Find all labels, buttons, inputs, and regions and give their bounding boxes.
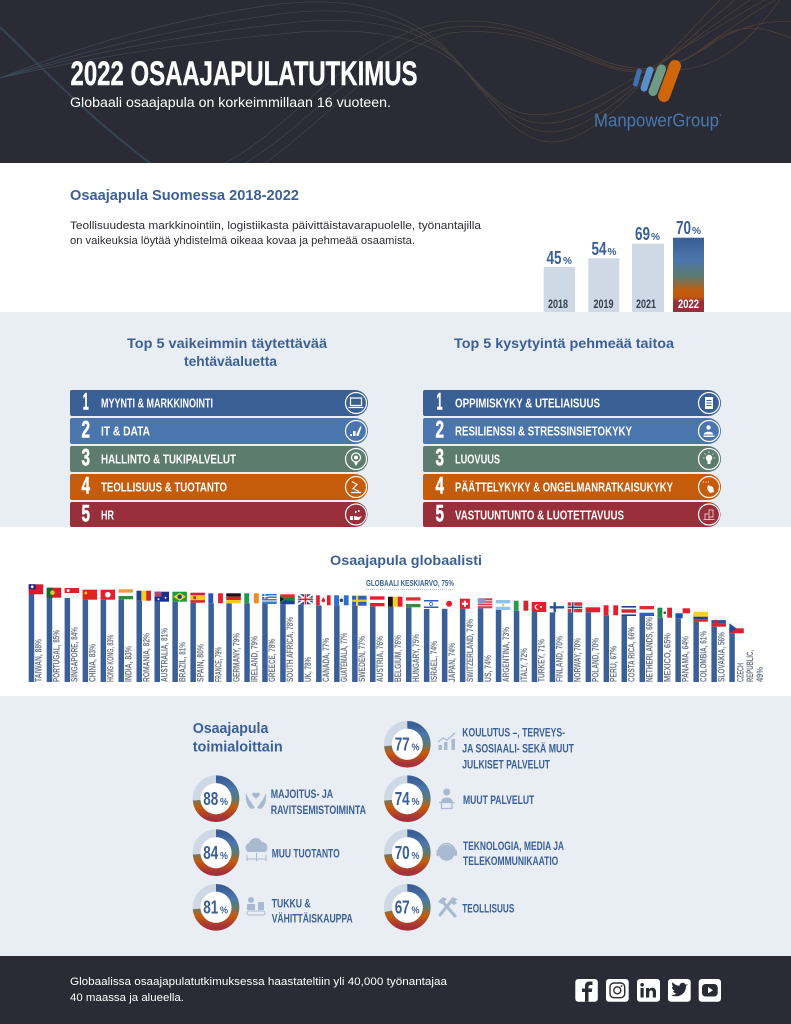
donut: 74%: %	[412, 797, 420, 808]
donut: 74%: 74	[395, 789, 410, 809]
bar: France	[208, 593, 224, 682]
role 4: TEOLLISUUS & TUOTANTO	[101, 480, 227, 495]
bar: Costa Rica	[622, 606, 638, 682]
bar: Japan: JAPAN, 74%	[447, 643, 458, 682]
bar chart: Finland 2018-2022: 2022	[678, 299, 699, 311]
skill 4: 4	[436, 472, 444, 499]
bar: Norway	[568, 602, 584, 682]
bar: Portugal	[47, 588, 63, 682]
bar: Sweden	[352, 596, 368, 682]
skill 5: 5	[436, 500, 444, 527]
label: education, health, public: KOULUTUS –, TERVEYS-	[462, 726, 565, 740]
bar chart: Finland 2018-2022: 2019	[594, 299, 614, 311]
label: wholesale and retail: TUKKU &	[272, 897, 311, 911]
donut: 67%: %	[412, 906, 420, 916]
bar: Czech Republic: 49%	[755, 667, 766, 682]
label: wholesale and retail	[272, 897, 353, 926]
bar chart: Finland 2018-2022: 2021	[636, 299, 656, 311]
text block: intro: Teollisuudesta markkinointiin, logistiikasta päivittäistavarapuolelle, työnantajilla	[70, 220, 482, 232]
bar: Peru	[604, 605, 620, 682]
bar: Panama: PANAMA, 64%	[680, 636, 691, 682]
label: other services: MUUT PALVELUT	[463, 793, 535, 807]
bar: Ireland: IRELAND, 79%	[249, 636, 260, 682]
bar: Hungary: HUNGARY, 75%	[411, 634, 422, 682]
bar: UK	[298, 594, 314, 682]
footer text	[70, 976, 448, 1004]
global average label: GLOBAALI KESKIARVO, 75%	[366, 579, 454, 588]
bar chart: Finland 2018-2022: 2018	[548, 299, 568, 311]
bar: Guatemala: GUATEMALA, 77%	[339, 633, 350, 682]
text block: intro	[70, 220, 482, 247]
bar: Czech Republic: REPUBLIC,	[745, 650, 756, 682]
icon: hammer and wrench	[438, 897, 458, 916]
bar: Hungary	[406, 597, 422, 682]
bar: Switzerland: SWITZERLAND, 74%	[465, 619, 476, 682]
role 1: MYYNTI & MARKKINOINTI	[101, 396, 213, 411]
skill 4	[423, 472, 721, 500]
bar: Slovakia	[711, 617, 727, 682]
bar: Singapore: SINGAPORE, 84%	[70, 627, 81, 682]
bar: Israel	[424, 599, 440, 682]
heading: by industry	[193, 721, 283, 756]
bar: Ireland	[244, 593, 260, 682]
bar: Australia: AUSTRALIA, 81%	[160, 628, 170, 682]
bar chart: Finland 2018-2022: 45	[546, 248, 562, 268]
bar chart: Finland 2018-2022: 70	[676, 218, 691, 238]
donut: 77%: 77	[395, 734, 410, 754]
list: top 5 roles	[70, 388, 368, 527]
text block: intro: on vaikeuksia löytää yhdistelmä oikeaa kovaa ja pehmeää osaamista.	[70, 235, 415, 247]
bar: Spain: SPAIN, 80%	[195, 644, 206, 682]
bar: Belgium: BELGIUM, 76%	[393, 635, 404, 682]
bar: US: US, 74%	[483, 655, 494, 682]
role 3: 3	[82, 444, 90, 471]
bar: Argentina: ARGENTINA, 73%	[501, 627, 512, 682]
role 4	[70, 472, 368, 500]
bar: Italy	[514, 601, 530, 682]
donut: 84%: 84	[203, 843, 218, 863]
role 2: 2	[82, 416, 90, 444]
icon: conveyor	[247, 897, 265, 915]
role 2	[70, 416, 368, 444]
bar: Argentina	[496, 600, 512, 682]
bar chart: Finland 2018-2022: %	[608, 247, 617, 258]
role 1	[70, 388, 368, 416]
icon: person at desk	[439, 788, 454, 808]
bar: Costa Rica: COSTA RICA, 66%	[626, 627, 638, 682]
bar: Poland: POLAND, 70%	[591, 638, 602, 682]
heading: global: Osaajapula globaalisti	[330, 552, 482, 568]
skill 2: RESILIENSSI & STRESSINSIETOKYKY	[455, 424, 632, 439]
donut: 81%: 81	[203, 898, 218, 918]
donut: 84%	[197, 833, 235, 872]
bar: Spain	[190, 593, 206, 682]
list: top 5 soft skills	[423, 388, 721, 527]
heading: by industry: toimialoittain	[193, 740, 283, 756]
footer text: 40 maassa ja alueella.	[70, 992, 184, 1004]
subtitle: Globaali osaajapula on korkeimmillaan 16 vuoteen.	[70, 95, 391, 110]
skill 5: VASTUUNTUNTO & LUOTETTAVUUS	[455, 508, 624, 522]
bar: Turkey: TURKEY, 71%	[537, 639, 548, 682]
heading: top 5 roles: tehtäväaluetta	[184, 354, 277, 369]
skill 2	[423, 416, 721, 444]
role 1: 1	[83, 388, 89, 416]
bar chart: countries	[29, 584, 766, 682]
skill 5	[423, 500, 720, 527]
label: technology, media, telecom: TELEKOMMUNIKAATIO	[463, 854, 558, 868]
footer text: Globaalissa osaajapulatutkimuksessa haastateltiin yli 40,000 työnantajaa	[70, 976, 448, 988]
header band	[0, 0, 791, 163]
role 4: 4	[82, 472, 90, 499]
bar: Turkey	[532, 602, 548, 682]
bar: South Africa: SOUTH AFRICA, 78%	[285, 617, 296, 682]
bar: Finland	[550, 602, 566, 682]
label: education, health, public	[462, 726, 574, 771]
skill 3: LUOVUUS	[455, 452, 500, 467]
donut: 88%	[197, 779, 235, 818]
role 5	[70, 500, 368, 527]
label: technology, media, telecom: TEKNOLOGIA, MEDIA JA	[463, 839, 564, 853]
donut: 81%: %	[220, 906, 228, 916]
bar: Czech Republic: CZECH	[735, 663, 746, 682]
heading: by industry: Osaajapula	[193, 721, 269, 737]
bar: Peru: PERU, 67%	[609, 646, 620, 682]
bar: Guatemala	[334, 595, 350, 682]
logo: ManpowerGroup	[594, 66, 721, 131]
bar: Australia	[154, 592, 170, 682]
icon: cloud network	[246, 838, 267, 861]
bar: Norway: NORWAY, 70%	[573, 638, 584, 682]
bar: Italy: ITALY, 72%	[519, 648, 530, 682]
bar: Taiwan: TAIWAN, 88%	[34, 639, 45, 682]
bar: Hong Kong: HONG KONG, 83%	[106, 635, 117, 682]
bar: Canada: CANADA, 77%	[321, 638, 332, 682]
bar: Singapore	[65, 588, 81, 682]
bar chart: Finland 2018-2022: %	[692, 226, 701, 237]
donut: 70%	[388, 833, 427, 872]
bar: Romania: ROMANIA, 82%	[142, 633, 152, 682]
role 3	[70, 444, 368, 472]
bar: Mexico: MEXICO, 65%	[662, 633, 674, 682]
heading: top 5 soft skills: Top 5 kysytyintä pehmeää taitoa	[454, 336, 675, 351]
donut: 67%	[388, 888, 427, 927]
bar: Israel: ISRAEL, 74%	[429, 641, 440, 682]
bar: Colombia: COLOMBIA, 61%	[698, 631, 709, 682]
bar: Switzerland	[460, 599, 476, 682]
donut: 70%: 70	[395, 843, 410, 863]
heading: top 5 roles: Top 5 vaikeimmin täytettävää	[127, 336, 328, 351]
bar chart: Finland 2018-2022	[544, 218, 704, 312]
donut: 88%: 88	[203, 789, 218, 809]
skill 3	[423, 444, 721, 472]
logo: ManpowerGroup: ManpowerGroup	[594, 110, 719, 131]
donut: 88%: %	[220, 797, 228, 808]
bar chart: Finland 2018-2022: %	[563, 256, 572, 267]
bar: Finland: FINLAND, 70%	[555, 636, 566, 682]
icon: Instagram	[606, 979, 629, 1002]
panel: Finland shortage	[0, 163, 791, 312]
icon: growth chart	[438, 733, 455, 750]
label: other production: MUU TUOTANTO	[272, 847, 340, 861]
bar: Czech Republic	[729, 623, 766, 682]
bar: Germany: GERMANY, 79%	[231, 633, 242, 682]
bar: US	[478, 598, 494, 682]
label: education, health, public: JA SOSIAALI- SEKÄ MUUT	[462, 740, 574, 755]
label: education, health, public: JULKISET PALVELUT	[462, 757, 550, 771]
bar: South Africa	[280, 594, 296, 682]
heading: Finland: Osaajapula Suomessa 2018-2022	[70, 188, 299, 204]
bar: Romania	[136, 591, 152, 682]
skill 1: OPPIMISKYKY & UTELIAISUUS	[455, 396, 600, 411]
skill 2: 2	[436, 416, 444, 444]
icon: LinkedIn	[637, 979, 660, 1002]
bar: Brazil: BRAZIL, 81%	[177, 642, 188, 682]
donut: 77%	[388, 725, 427, 764]
icon: Twitter	[668, 979, 691, 1002]
label: industry: TEOLLISUUS	[462, 901, 514, 915]
bar: China: CHINA, 83%	[88, 644, 99, 682]
label: accommodation and food	[271, 787, 366, 817]
bar: Germany	[226, 593, 242, 682]
icon: headset chat	[436, 844, 457, 861]
donut: 67%: 67	[395, 898, 410, 918]
label: technology, media, telecom	[463, 839, 564, 868]
footer band	[0, 956, 791, 1024]
bar: Canada	[316, 595, 332, 682]
global average marker	[366, 590, 454, 600]
bar: India: INDIA, 83%	[124, 646, 134, 682]
bar: Poland	[586, 602, 602, 682]
bar: Greece	[262, 594, 278, 682]
bar chart: Finland 2018-2022: 69	[635, 224, 650, 244]
label: wholesale and retail: VÄHITTÄISKAUPPA	[272, 911, 353, 926]
panel: top 5 lists	[0, 312, 791, 527]
role 3: HALLINTO & TUKIPALVELUT	[101, 452, 236, 467]
donut: 84%: %	[220, 851, 228, 862]
bar: Austria: AUSTRIA, 76%	[375, 636, 386, 682]
bar: Netherlands	[640, 606, 656, 682]
skill 4: PÄÄTTELYKYKY & ONGELMANRATKAISUKYKY	[455, 480, 673, 495]
skill 3: 3	[436, 444, 444, 471]
donut: 77%: %	[412, 742, 420, 754]
icon: Facebook	[575, 979, 598, 1002]
donut: 74%	[388, 779, 427, 818]
bar chart: Finland 2018-2022: 54	[592, 239, 606, 259]
bar: UK: UK, 78%	[303, 657, 314, 682]
panel: by industry	[0, 696, 791, 956]
role 2: IT & DATA	[101, 424, 150, 439]
title: 2022 OSAAJAPULATUTKIMUS	[70, 55, 418, 93]
bar: Netherlands: NETHERLANDS, 66%	[644, 617, 656, 682]
label: accommodation and food: RAVITSEMISTOIMINTA	[271, 803, 366, 817]
bar: France: FRANCE, 79%	[213, 647, 224, 682]
role 5: HR	[101, 508, 114, 522]
skill 1	[423, 388, 721, 416]
bar chart: Finland 2018-2022: %	[651, 232, 660, 243]
bar: Greece: GREECE, 78%	[267, 639, 278, 682]
bar: China	[83, 590, 99, 682]
bar: Slovakia: SLOVAKIA, 56%	[716, 632, 727, 682]
panel: global	[0, 527, 791, 696]
skill 1: 1	[436, 388, 442, 416]
bar: Colombia	[693, 612, 709, 682]
bar: Portugal: PORTUGAL, 85%	[52, 630, 63, 682]
bar: Sweden: SWEDEN, 77%	[357, 636, 368, 682]
bar: India	[118, 589, 134, 682]
donut: 70%: %	[412, 851, 420, 862]
icon: caring hands	[246, 793, 266, 809]
bar: Austria	[370, 596, 386, 682]
donut: 81%	[197, 888, 235, 927]
bar: Mexico	[658, 608, 674, 682]
label: accommodation and food: MAJOITUS- JA	[271, 787, 333, 801]
bar: Belgium	[388, 597, 404, 682]
heading: top 5 roles	[127, 336, 328, 369]
bar: Japan	[442, 599, 458, 682]
icon: YouTube	[699, 979, 721, 1002]
bar: Brazil	[172, 592, 188, 682]
bar: Panama	[675, 608, 691, 682]
bar: Hong Kong	[101, 590, 117, 682]
role 5: 5	[82, 500, 90, 527]
bar: Taiwan	[29, 584, 45, 682]
